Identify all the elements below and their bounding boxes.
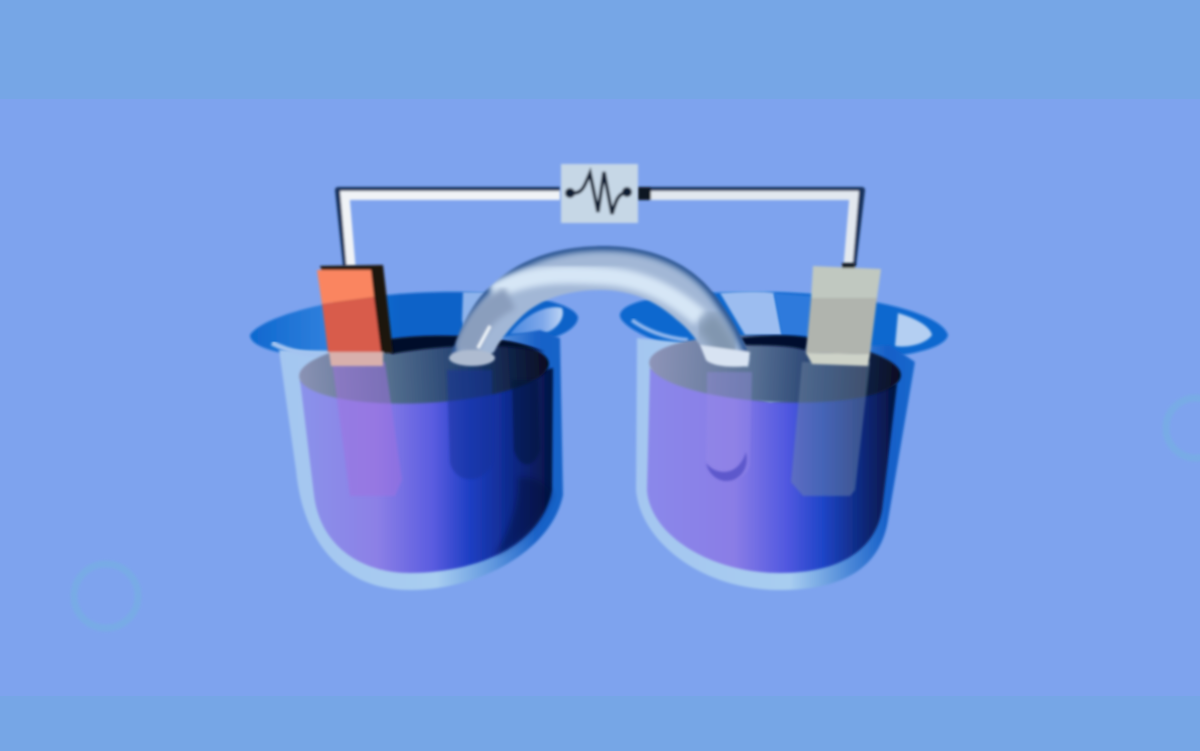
submerged electrode bbox=[332, 362, 402, 496]
copper front face upper bbox=[317, 270, 374, 304]
left rim lip bbox=[272, 343, 332, 356]
bottom band bbox=[0, 696, 1200, 751]
copper front face lower bbox=[322, 297, 381, 352]
wire circuit bbox=[338, 187, 862, 266]
tube top dark edge bbox=[450, 246, 750, 358]
submerged electrode bbox=[791, 362, 870, 496]
right rim lip bbox=[632, 320, 688, 340]
right beaker glass bbox=[636, 338, 915, 590]
left liquid body bbox=[300, 368, 553, 573]
wire: right bbox=[638, 190, 862, 266]
decorative circle left bbox=[74, 564, 138, 628]
wire: left bbox=[338, 190, 560, 266]
submerged tube bbox=[447, 370, 492, 479]
left beaker bbox=[250, 292, 578, 590]
top band bbox=[0, 0, 1200, 99]
tube highlight band bbox=[492, 275, 700, 318]
resistor symbol bbox=[570, 172, 628, 214]
salt bridge tube bbox=[448, 244, 752, 368]
right liquid body bbox=[647, 368, 897, 573]
right beaker rim bbox=[620, 292, 948, 358]
right tube mouth bbox=[700, 345, 750, 367]
right electrode zinc bbox=[806, 263, 881, 366]
left tube mouth bbox=[449, 350, 495, 366]
right beaker bbox=[620, 292, 948, 590]
right rim pale back bbox=[720, 292, 782, 335]
tube left shade bbox=[465, 298, 510, 352]
resistor box bbox=[561, 164, 638, 223]
tube right shade bbox=[704, 320, 730, 362]
left beaker rim bbox=[250, 292, 578, 356]
galvanic cell illustration bbox=[248, 162, 950, 591]
submerged tube bbox=[706, 372, 752, 480]
tube streak bbox=[478, 326, 490, 348]
left liquid surface bbox=[297, 331, 551, 409]
decorative circle right bbox=[1166, 398, 1200, 458]
left beaker glass bbox=[279, 330, 563, 590]
left electrode copper bbox=[317, 265, 393, 366]
right liquid surface bbox=[647, 329, 903, 409]
left rim inner loop bbox=[510, 307, 563, 334]
